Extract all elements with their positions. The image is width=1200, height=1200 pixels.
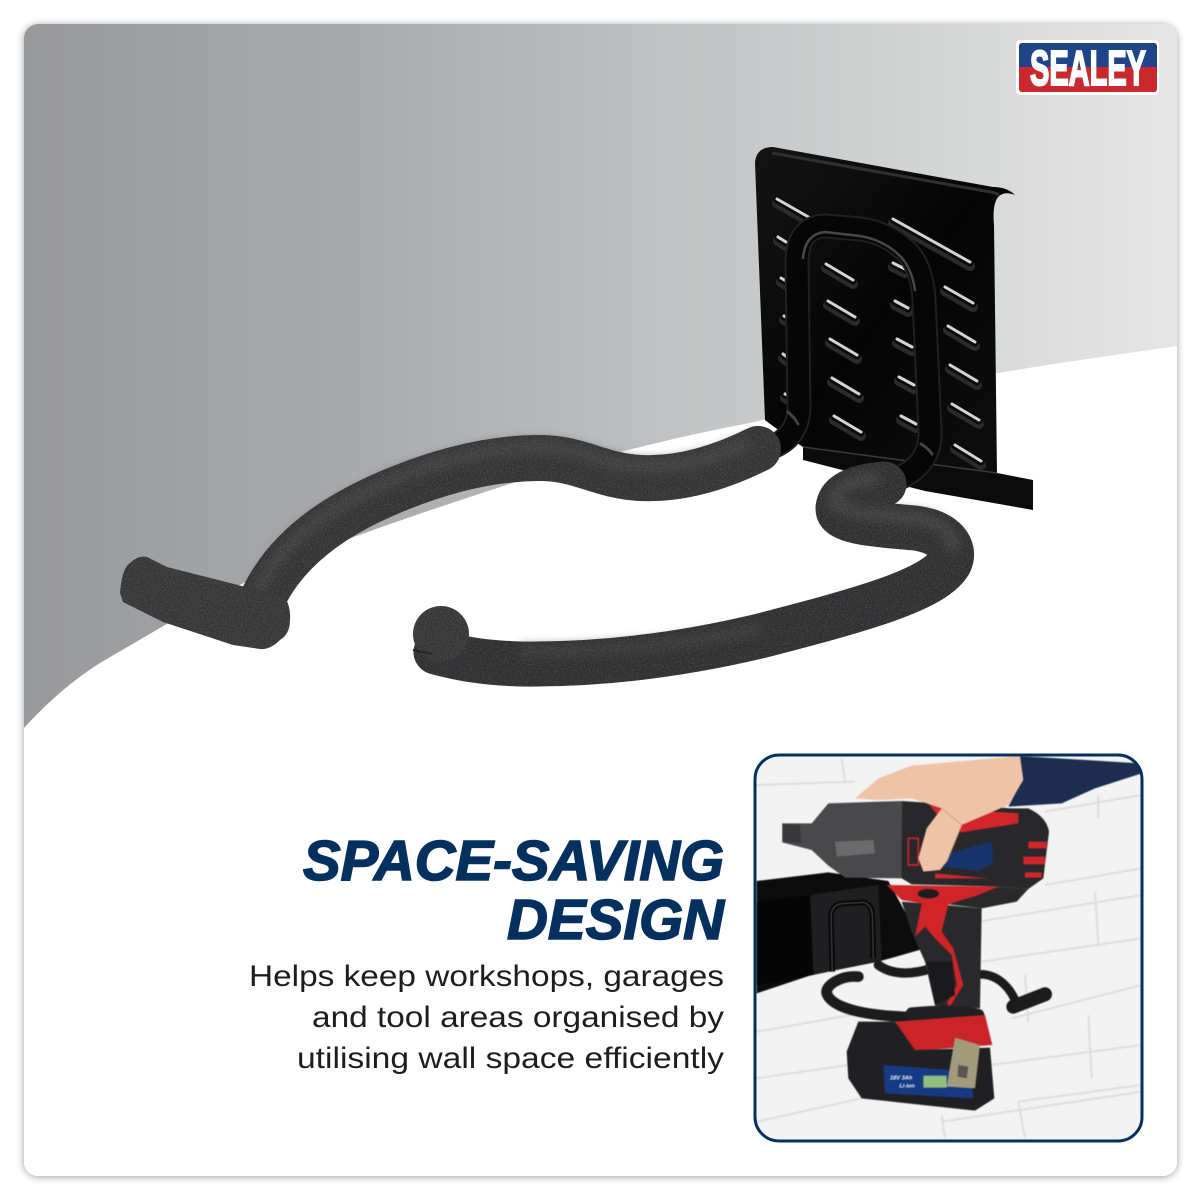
- panel: inset photo of impact wrench on hook: [755, 755, 1142, 1141]
- plate slots: [777, 199, 981, 465]
- heading: [303, 829, 726, 952]
- body text: utilising wall space efficiently: [297, 1042, 724, 1075]
- heading: DESIGN: [507, 888, 726, 952]
- steel wire loop: [772, 226, 932, 480]
- heading: SPACE-SAVING: [303, 829, 724, 893]
- foam hook in photo: [827, 965, 1045, 1017]
- hook mounting plate: [755, 147, 1033, 510]
- wrench body: [782, 801, 902, 878]
- wrench handle: [902, 902, 982, 1008]
- hand and sleeve: [1008, 756, 1142, 807]
- wall rail: [757, 872, 925, 993]
- foam arm: lower: [413, 478, 952, 664]
- hook front over handle: [912, 1012, 978, 1015]
- battery: [895, 1015, 992, 1051]
- body text: Helps keep workshops, garages: [249, 960, 724, 993]
- panel: inset photo of impact wrench on hook: 18V 3Ah: [890, 1075, 913, 1081]
- product: wall hook: [120, 147, 1033, 664]
- logo: Sealey: [1016, 40, 1159, 96]
- body text: and tool areas organised by: [312, 1001, 724, 1034]
- body text: [249, 960, 724, 1075]
- foam arm: upper: [120, 442, 758, 649]
- brick wall: [757, 758, 1142, 1138]
- foam crossbar: [120, 557, 290, 649]
- panel: inset photo of impact wrench on hook: Li-ion: [899, 1083, 915, 1089]
